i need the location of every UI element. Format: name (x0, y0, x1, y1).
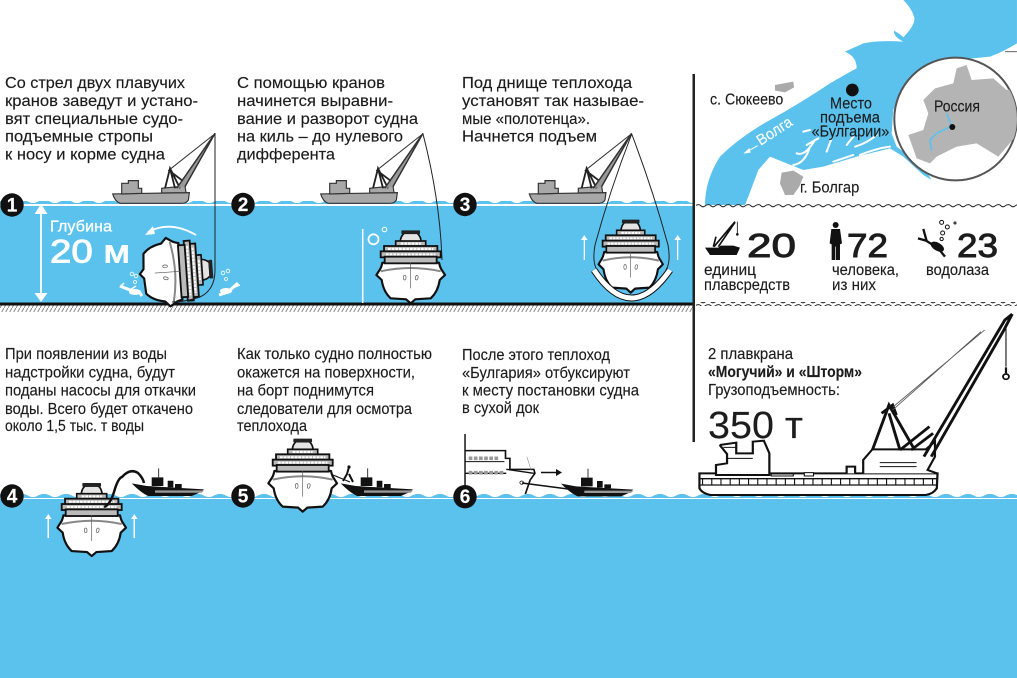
wavy rule: bottom of stats (696, 302, 1017, 306)
text: step 4: воды. Всего будет откачено (5, 401, 193, 418)
crane: step 2 (321, 133, 423, 203)
text: step 5: следователи для осмотра (237, 401, 412, 418)
ship on surface, step 5 (268, 439, 337, 512)
text: step 5: на борт поднимутся (237, 383, 374, 400)
icon: left diver (120, 272, 142, 296)
ship stern, step 6 (465, 434, 535, 494)
map (705, 0, 1017, 205)
stat: vessels: единиц (704, 262, 756, 279)
text: step 3: установят так называе- (462, 93, 644, 110)
seabed (0, 302, 695, 312)
stat: vessels: плавсредств (704, 277, 790, 294)
label: Bolgar: г. Болгар (800, 180, 859, 197)
ship on its side, step 1 (137, 235, 215, 308)
text: step 2: начинется выравни- (237, 93, 393, 110)
text: floating cranes (708, 346, 862, 447)
text: step 5 (237, 346, 432, 435)
stat: divers: водолаза (926, 262, 989, 279)
step number 2: 2 (238, 195, 248, 216)
locator line (1005, 50, 1017, 53)
cable: step 2 (423, 134, 442, 260)
text: step 6: «Булгария» отбуксируют (462, 365, 631, 382)
icon: diver (918, 220, 956, 257)
divider (692, 74, 695, 442)
step number 5: 5 (238, 486, 249, 508)
label: lifting site: Место (830, 95, 872, 112)
wavy rule: top of stats (696, 204, 1017, 208)
stat: vessels: 20 (747, 227, 796, 264)
stat: people: 72 (847, 227, 888, 264)
stat: vessels (704, 222, 796, 294)
locator globe: Россия (934, 99, 980, 116)
label: Volga (743, 113, 796, 154)
step number 3: 3 (460, 195, 470, 216)
land patches (775, 82, 803, 195)
cable: step 1 (172, 133, 215, 302)
text: step 4 (5, 346, 196, 435)
text: step 1: к носу и корме судна (5, 146, 165, 163)
stat: divers: 23 (957, 227, 998, 264)
label: lifting site: подъема (820, 110, 880, 127)
text: step 4: надстройки судна, будут (5, 365, 176, 382)
ship in towels, step 3 (599, 220, 663, 293)
text: step 6: в сухой док (462, 400, 540, 417)
text: step 4: поданы насосы для откачки (5, 383, 196, 400)
text: step 4: около 1,5 тыс. т воды (5, 418, 144, 435)
step number 6 (453, 485, 477, 508)
panel: underwater section (0, 200, 694, 303)
towel sling (594, 134, 670, 298)
text: floating cranes: 2 плавкрана (708, 346, 793, 363)
text: step 1: кранов заведут и устано- (5, 93, 198, 110)
lift arrows, step 3 (581, 235, 681, 260)
text: step 6 (462, 347, 639, 417)
text: step 1: вят специальные судо- (5, 111, 183, 128)
investigator on gangway (333, 465, 353, 482)
crane: step 1 (113, 133, 215, 203)
icon: person (830, 222, 842, 260)
text: step 6: После этого теплоход (462, 347, 611, 364)
right superstructure (847, 442, 937, 473)
depth arrow and label: 20 м (50, 234, 130, 270)
lifting site dot (846, 84, 859, 96)
step number 1: 1 (7, 196, 18, 216)
text: step 2: вание и разворот судна (237, 111, 418, 128)
hull (699, 473, 938, 495)
text: step 3 (462, 75, 644, 146)
text: step 2 (237, 75, 418, 163)
icon: crane vessel (705, 222, 740, 255)
zero degrees marker (363, 227, 387, 303)
text: step 6: к месту постановки судна (462, 382, 639, 400)
tow cable (522, 483, 568, 489)
step number 6: 6 (460, 487, 470, 508)
text: step 3: мые «полотенца». (462, 111, 590, 128)
text: step 3: Начнется подъем (462, 129, 597, 146)
river islands (793, 130, 890, 165)
tug: step 5 (341, 468, 413, 496)
locator globe (894, 58, 1017, 180)
text: step 2: С помощью кранов (237, 75, 385, 92)
label: Syukeevo: с. Сюкеево (710, 91, 783, 108)
stat: people: из них (832, 277, 876, 294)
text: floating cranes: «Могучий» и «Шторм» (708, 364, 862, 381)
left superstructure (716, 441, 769, 475)
label: lifting site: «Булгарии» (812, 124, 889, 141)
A-frame (872, 405, 915, 450)
text: step 1: Со стрел двух плавучих (5, 75, 185, 92)
stat: divers (918, 220, 998, 279)
text: step 2: дифферента (237, 146, 335, 163)
step number 1 (0, 193, 24, 217)
lift arrows, step 4 (45, 514, 138, 538)
text: step 1 (5, 75, 198, 163)
icon: right diver (219, 269, 240, 295)
stat: people (830, 222, 899, 294)
text: step 1: подъемные стропы (5, 129, 153, 146)
text: step 5: окажется на поверхности, (237, 365, 415, 382)
river Volga (705, 0, 1017, 205)
depth arrow and label (34, 204, 130, 302)
label: lifting site (812, 95, 889, 141)
step number 4: 4 (7, 486, 18, 508)
rotation arrow (145, 226, 196, 235)
boom (924, 314, 1012, 457)
crane: step 3 (529, 133, 632, 203)
step number 2 (231, 193, 255, 216)
ship surfacing, step 4 (57, 483, 126, 556)
text: floating cranes: 350 т (708, 405, 803, 447)
depth arrow and label: Глубина (50, 219, 112, 236)
hook (1004, 325, 1007, 367)
step number 3 (453, 193, 477, 216)
tug: step 4 (132, 468, 204, 496)
text: step 5: Как только судно полностью (237, 346, 432, 363)
label: Volga: Волга (754, 113, 796, 149)
panel: lower water (0, 493, 1017, 678)
step number 5 (231, 484, 255, 508)
step number 4 (0, 484, 24, 508)
text: floating cranes: Грузоподъемность: (708, 382, 840, 399)
ship upright, step 2 (376, 230, 445, 303)
text: step 3: Под днище теплохода (462, 75, 632, 92)
stat: people: человека, (832, 262, 899, 279)
tug: step 6 (561, 469, 633, 496)
big floating crane (699, 314, 1012, 495)
text: step 5: теплохода (237, 418, 307, 435)
text: step 4: При появлении из воды (5, 346, 167, 363)
pump hose (104, 471, 144, 507)
tow arrow (541, 469, 562, 476)
text: step 2: на киль – до нулевого (237, 129, 403, 146)
